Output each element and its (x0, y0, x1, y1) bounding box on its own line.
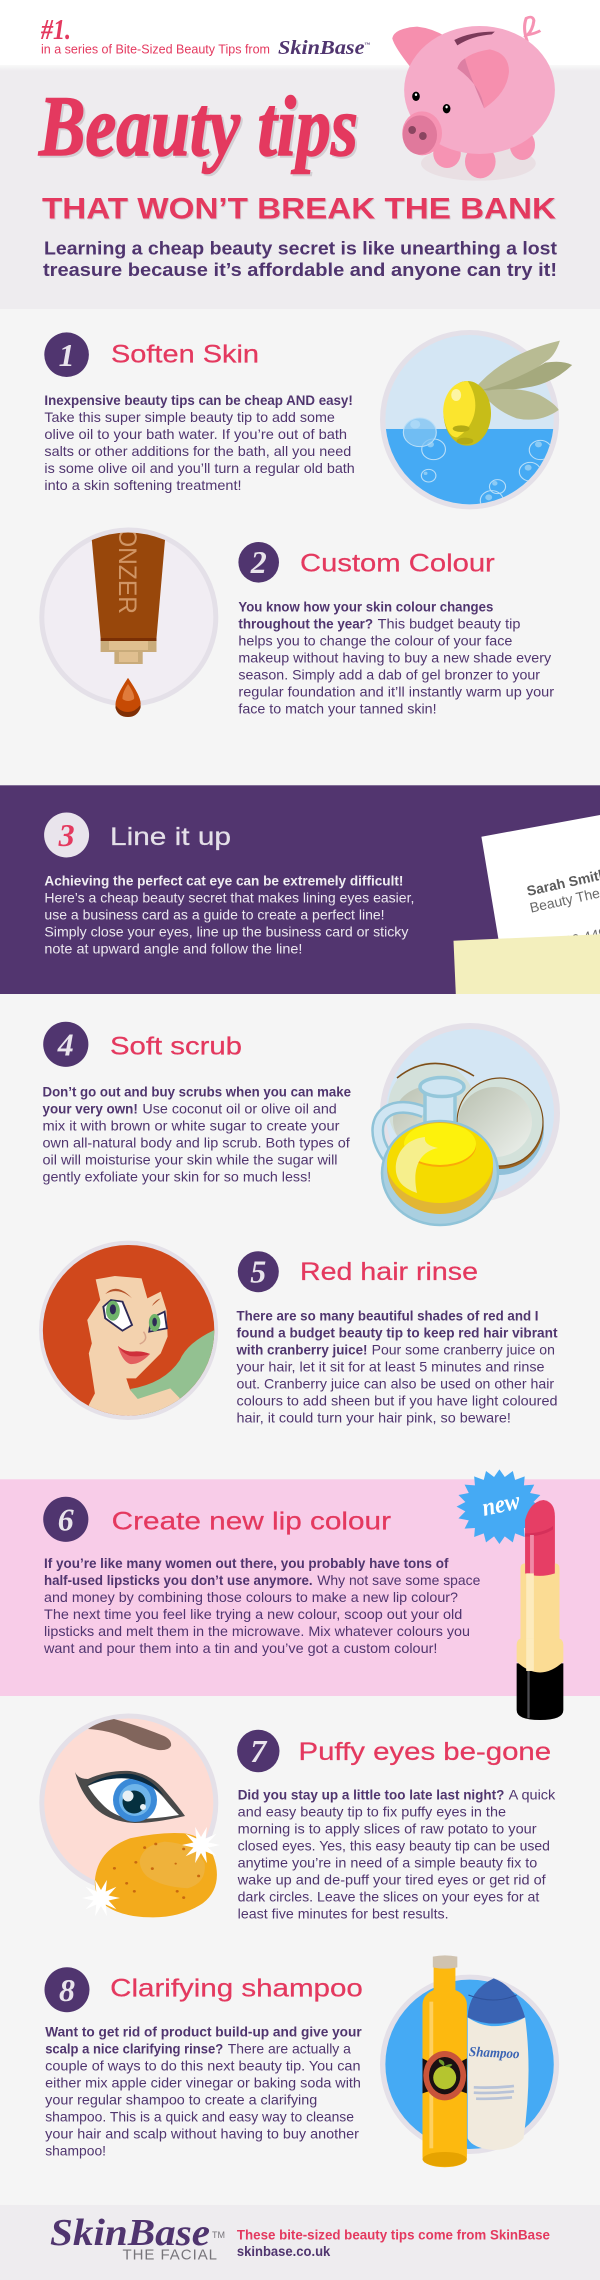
number badge 1 (44, 332, 89, 377)
icon: bronzer tube (40, 528, 218, 717)
tip 5 text: Pour some cranberry juice on (372, 1342, 555, 1358)
SkinBase logo (50, 2212, 225, 2264)
tip 7 text: Did you stay up a little too late last night? (238, 1786, 504, 1802)
number badge 8 (44, 1967, 90, 2012)
tip 6 text: Why not save some space (317, 1572, 481, 1588)
tip 6 text: If you’re like many women out there, you probably have tons of (44, 1555, 449, 1571)
tip 2 text: This budget beauty tip (378, 616, 521, 632)
tip 5 text: your hair, let it sit for at least 5 minutes and rinse (236, 1359, 545, 1375)
number badge 4: 4 (57, 1026, 74, 1062)
tip 7 text: and easy beauty tip to fix puffy eyes in the (238, 1803, 506, 1819)
icon: sticky note (454, 934, 600, 994)
panel: tip 3 purple band (0, 785, 600, 994)
tip 3 text: Achieving the perfect cat eye can be extremely difficult! (44, 873, 403, 889)
panel: tip 8 (44, 1955, 559, 2167)
tip 3 text: Here’s a cheap beauty secret that makes lining eyes easier, (44, 890, 414, 906)
tip 3 text: Simply close your eyes, line up the business card or sticky (44, 924, 408, 940)
tip 2 text: makeup without having to buy a new shade every (238, 650, 551, 666)
tip 8 text: shampoo! (45, 2143, 106, 2159)
icon: eye and potato (42, 1716, 216, 1890)
tip 2 text: season. Simply add a dab of gel bronzer to your (238, 667, 540, 683)
tip 5 text: found a budget beauty tip to keep red hair vibrant (236, 1325, 558, 1341)
badge: new starburst: new (480, 1487, 523, 1522)
tip 1 text: Inexpensive beauty tips can be cheap AND easy! (44, 392, 353, 408)
number badge 7 (237, 1730, 280, 1772)
SkinBase logo small: SkinBase (278, 37, 356, 59)
tip 8 text: your hair and scalp without having to buy another (45, 2126, 359, 2142)
panel: tip 6 pink band (0, 1469, 600, 1720)
icon: business card (481, 815, 600, 951)
icon: piggy bank (392, 17, 555, 181)
tip 6 text: half-used lipsticks you don’t use anymore. (44, 1572, 313, 1588)
tip 7 text: A quick (509, 1786, 556, 1802)
tip 8 text: couple of ways to do this next beauty tip. You can (45, 2058, 360, 2074)
tip 7 text: least five minutes for best results. (238, 1905, 449, 1921)
number badge 6 (43, 1497, 88, 1542)
heading: Soften Skin: Soften Skin (111, 341, 259, 369)
panel: tip 7 (42, 1716, 556, 1921)
panel: tip 4 (42, 1022, 557, 1225)
SkinBase logo small: ™ (364, 42, 370, 48)
icon: coconut and oil flask (378, 1026, 557, 1225)
tip 4 text: gently exfoliate your skin for so much less! (42, 1169, 311, 1185)
SkinBase logo: TM (212, 2230, 225, 2240)
footer text (237, 2227, 550, 2259)
tip 4 text: your very own! (42, 1101, 138, 1117)
series number: #1. (40, 14, 71, 46)
tip 4 text: oil will moisturise your skin while the sugar will (42, 1152, 338, 1168)
icon: vinegar bottle and shampoo: Shampoo (469, 2045, 520, 2062)
tip 8 text: There are actually a (228, 2041, 351, 2057)
intro text: Learning a cheap beauty secret is like unearthing a lost (44, 238, 557, 258)
tip 1 text: olive oil to your bath water. If you’re out of bath (44, 426, 347, 442)
tip 1 text: salts or other additions for the bath, all you need (44, 443, 351, 459)
panel: header strip (0, 0, 600, 65)
tip 5 text: out. Cranberry juice can also be used on other hair (236, 1376, 554, 1392)
number badge 8: 8 (59, 1972, 75, 2008)
intro text (43, 238, 557, 280)
icon: bronzer tube: BRONZER (113, 494, 141, 614)
tip 1 text: into a skin softening treatment! (44, 477, 242, 493)
tip 2 text: face to match your tanned skin! (238, 701, 437, 717)
panel: footer (0, 2205, 600, 2280)
tip 7 text (237, 1786, 556, 1921)
tip 6 text: The next time you feel like trying a new colour, scoop out your old (44, 1606, 462, 1622)
number badge 5: 5 (250, 1254, 266, 1290)
number badge 3: 3 (58, 817, 75, 853)
footer text: skinbase.co.uk (237, 2244, 331, 2259)
heading: Custom Colour: Custom Colour (300, 550, 495, 578)
icon: olive in bath water (379, 330, 572, 511)
badge: new starburst (457, 1469, 542, 1544)
heading: Clarifying shampoo: Clarifying shampoo (110, 1975, 363, 2003)
tip 7 text: morning is to apply slices of raw potato to your (238, 1820, 537, 1836)
tip 8 text: either mix apple cider vinegar or baking soda with (45, 2075, 361, 2091)
heading: Puffy eyes be-gone: Puffy eyes be-gone (298, 1738, 551, 1766)
tip 1 text (44, 392, 355, 493)
icon: red hair portrait (38, 1240, 222, 1420)
number badge 2: 2 (250, 544, 267, 580)
tip 5 text: colours to add sheen but if you have light coloured (236, 1393, 558, 1409)
heading: Soft scrub: Soft scrub (110, 1032, 242, 1060)
tip 5 text (236, 1308, 558, 1426)
tip 6 text: lipsticks and melt them in the microwave. Mix whatever colours you (44, 1623, 470, 1639)
number badge 1: 1 (59, 337, 75, 373)
tip 8 text: scalp a nice clarifying rinse? (45, 2041, 223, 2057)
tip 5 text: with cranberry juice! (236, 1342, 368, 1358)
tip 7 text: closed eyes. Yes, this easy beauty tip can be used (238, 1837, 550, 1853)
number badge 5 (238, 1251, 279, 1292)
tip 4 text (42, 1084, 351, 1185)
tip 2 text: regular foundation and it’ll instantly warm up your (238, 684, 554, 700)
tip 6 text: and money by combining those colours to make a new lip colour? (44, 1589, 458, 1605)
tip 1 text: Take this super simple beauty tip to add some (44, 409, 335, 425)
tip 5 text: hair, it could turn your hair pink, so beware! (236, 1410, 511, 1426)
panel: title background (0, 65, 600, 309)
tip 2 text: You know how your skin colour changes (238, 599, 493, 615)
tip 2 text: helps you to change the colour of your face (238, 633, 513, 649)
icon: vinegar bottle and shampoo (380, 1955, 559, 2167)
number badge 7: 7 (250, 1733, 268, 1769)
tip 5 text: There are so many beautiful shades of red and I (236, 1308, 538, 1324)
icon: lipstick (517, 1500, 563, 1720)
tip 8 text: shampoo. This is a quick and easy way to cleanse (45, 2109, 354, 2125)
icon: potato slice (95, 1833, 217, 1917)
heading: Red hair rinse: Red hair rinse (300, 1258, 478, 1286)
tip 4 text: Use coconut oil or olive oil and (142, 1101, 337, 1117)
intro text: treasure because it’s affordable and anyone can try it! (43, 260, 557, 280)
tip 6 text: want and pour them into a tin and you’ve got a custom colour! (43, 1640, 437, 1656)
icon: sparkle right (182, 1827, 220, 1863)
number badge 4 (43, 1022, 88, 1067)
series line: in a series of Bite-Sized Beauty Tips from (41, 42, 270, 56)
tip 4 text: Don’t go out and buy scrubs when you can make (42, 1084, 351, 1100)
subtitle: THAT WON’T BREAK THE BANK (42, 192, 556, 226)
tip 7 text: anytime you’re in need of a simple beauty fix to (238, 1854, 538, 1870)
tip 4 text: own all-natural body and lip scrub. Both types of (42, 1135, 350, 1151)
tip 8 text (45, 2024, 362, 2159)
tip 3 text: use a business card as a guide to create a perfect line! (44, 907, 385, 923)
heading: Line it up: Line it up (110, 823, 231, 851)
panel: tip 1 (44, 330, 572, 511)
heading: Create new lip colour: Create new lip colour (112, 1507, 391, 1535)
panel: tip 5 (38, 1240, 558, 1426)
number badge 6: 6 (58, 1502, 74, 1538)
tip 6 text (43, 1555, 481, 1656)
tip 7 text: wake up and de-puff your tired eyes or get rid of (237, 1871, 546, 1887)
SkinBase logo: SkinBase (50, 2212, 210, 2254)
number badge 3 (44, 812, 89, 858)
tip 2 text: throughout the year? (238, 616, 373, 632)
title: Beauty tips: Beauty tips (38, 78, 358, 174)
tip 7 text: dark circles. Leave the slices on your eyes for at (238, 1888, 539, 1904)
tip 8 text: your regular shampoo to create a clarifying (45, 2092, 317, 2108)
tip 3 text: note at upward angle and follow the line! (44, 941, 302, 957)
footer text: These bite-sized beauty tips come from SkinBase (237, 2227, 550, 2242)
number badge 2 (238, 542, 279, 583)
tip 8 text: Want to get rid of product build-up and give your (45, 2024, 362, 2040)
tip 3 text (44, 873, 414, 957)
panel: tip 2 (40, 528, 554, 717)
tip 2 text (238, 599, 554, 717)
SkinBase logo: THE FACIAL (122, 2246, 217, 2264)
tip 1 text: is some olive oil and you’ll turn a regular old bath (44, 460, 355, 476)
tip 4 text: mix it with brown or white sugar to create your (42, 1118, 340, 1134)
icon: sparkle left (82, 1880, 120, 1916)
